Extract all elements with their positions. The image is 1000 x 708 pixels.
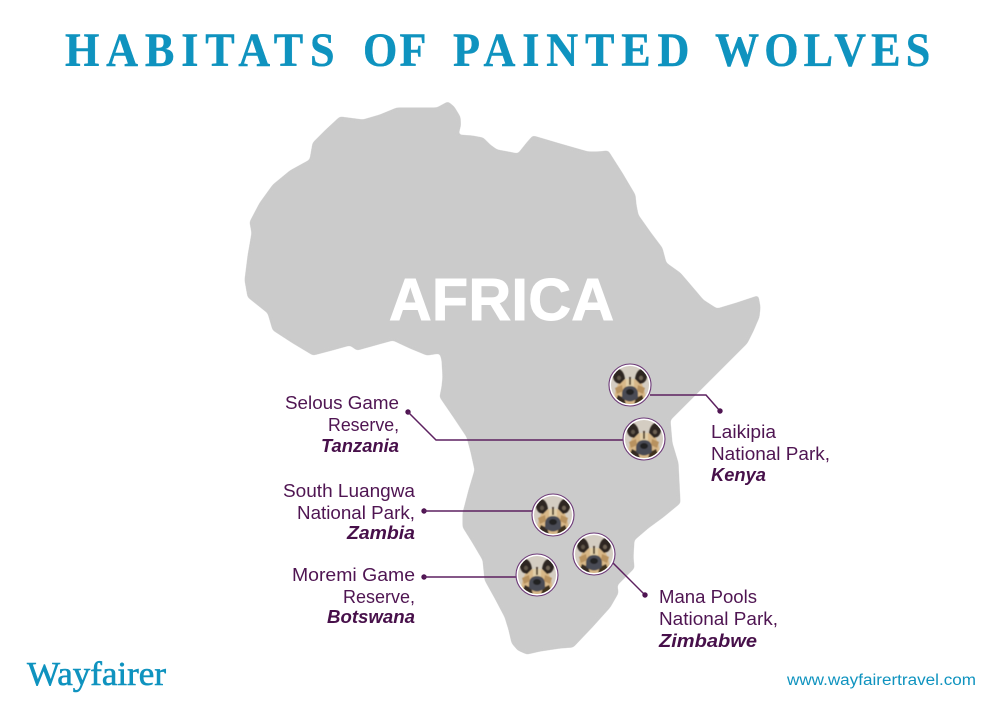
label: Selous Game Reserve bbox=[285, 393, 399, 456]
connector: South Luangwa bbox=[421, 508, 533, 514]
label: Selous Game Reserve: Reserve, bbox=[328, 415, 399, 435]
label: Laikipia: National Park, bbox=[711, 444, 830, 464]
label: Moremi Game Reserve: Reserve, bbox=[343, 587, 415, 607]
title: PAINTED bbox=[453, 23, 689, 76]
map: Africa silhouette bbox=[245, 102, 760, 654]
connector: Moremi bbox=[421, 574, 517, 580]
connector: Selous bbox=[405, 409, 624, 440]
label: Mana Pools: Mana Pools bbox=[659, 587, 757, 607]
title: OF bbox=[363, 23, 426, 76]
label: South Luangwa bbox=[283, 481, 416, 543]
label: Laikipia: Laikipia bbox=[711, 422, 777, 442]
title bbox=[65, 23, 930, 76]
label: Laikipia bbox=[711, 422, 830, 485]
connector: Mana Pools bbox=[613, 563, 648, 598]
label: Mana Pools: Zimbabwe bbox=[658, 631, 757, 651]
icon: wolf Selous bbox=[623, 418, 665, 461]
label: Selous Game Reserve: Tanzania bbox=[321, 436, 399, 456]
icon: wolf Mana Pools bbox=[573, 533, 615, 576]
label: Moremi Game Reserve bbox=[292, 565, 415, 627]
logo: Wayfairer: Wayfairer bbox=[27, 656, 167, 693]
website url: www.wayfairertravel.com bbox=[786, 672, 976, 689]
label: Moremi Game Reserve: Botswana bbox=[327, 607, 415, 627]
label: Selous Game Reserve: Selous Game bbox=[285, 393, 399, 413]
title: HABITATS bbox=[65, 23, 335, 76]
icon: wolf Laikipia bbox=[609, 364, 651, 407]
label: South Luangwa: Zambia bbox=[346, 523, 415, 543]
label: Mana Pools bbox=[658, 587, 778, 651]
label: Laikipia: Kenya bbox=[711, 465, 766, 485]
label: South Luangwa: South Luangwa bbox=[283, 481, 416, 501]
connector: Laikipia bbox=[650, 395, 723, 414]
map label: AFRICA: AFRICA bbox=[389, 267, 614, 333]
icon: wolf South Luangwa bbox=[532, 494, 574, 537]
label: Mana Pools: National Park, bbox=[659, 609, 778, 629]
label: South Luangwa: National Park, bbox=[297, 503, 415, 523]
icon: wolf Moremi bbox=[516, 554, 558, 597]
title: WOLVES bbox=[715, 23, 930, 76]
label: Moremi Game Reserve: Moremi Game bbox=[292, 565, 415, 585]
